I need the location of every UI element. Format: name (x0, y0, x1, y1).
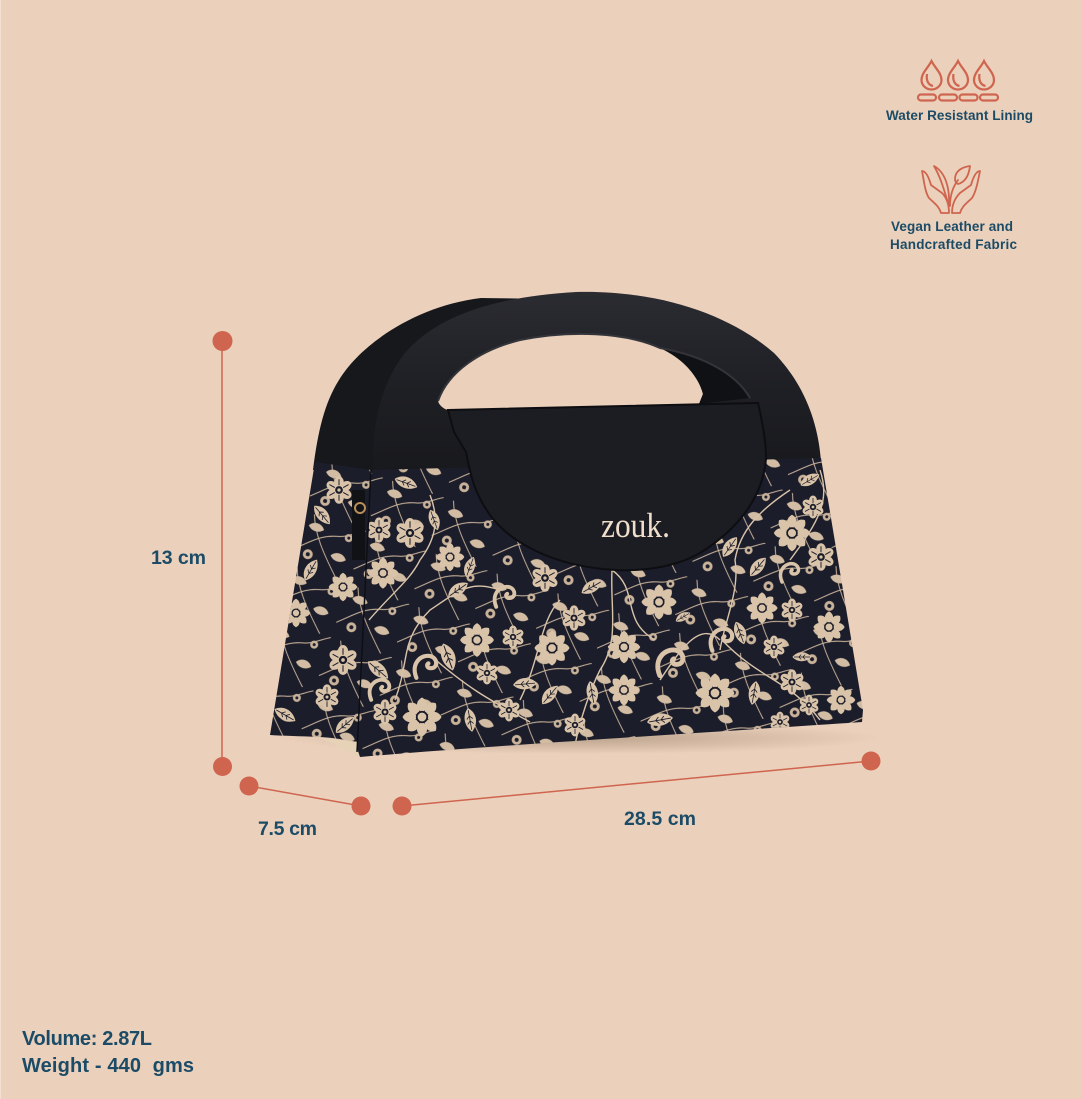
ground shadow (280, 722, 880, 754)
panel fold edge (357, 470, 371, 752)
volume and weight: Weight - 440 gms (22, 1055, 194, 1077)
label: water resistant lining: Water Resistant Lining (886, 108, 1033, 123)
label: vegan leather and handcrafted fabric (890, 219, 1017, 252)
dimension: height: 13 cm (151, 547, 206, 569)
strap loop (352, 490, 365, 560)
front handle (373, 292, 821, 472)
front fabric panel (355, 455, 870, 760)
dimension: height (151, 331, 232, 776)
handbag photo (260, 292, 880, 760)
dimension: width (392, 752, 880, 830)
handle rim stitching (438, 334, 750, 401)
volume and weight (22, 1028, 194, 1077)
handle opening (438, 334, 703, 411)
dimension: depth: 7.5 cm (258, 818, 317, 840)
logo: zouk. (601, 506, 670, 545)
dimension: depth (240, 776, 370, 840)
back handle seen through opening (660, 348, 750, 404)
back handle and bag interior (313, 298, 760, 470)
volume and weight: Volume: 2.87L (22, 1028, 152, 1050)
side fabric panel (270, 462, 370, 742)
dimension: width: 28.5 cm (624, 808, 696, 830)
icon: hands with leaf (922, 166, 980, 213)
label: vegan leather and handcrafted fabric: Handcrafted Fabric (890, 237, 1017, 252)
flap (448, 403, 766, 570)
gold ring (355, 503, 365, 513)
icon: water drops (918, 61, 998, 100)
cream lining wedge (317, 737, 360, 757)
label: vegan leather and handcrafted fabric: Vegan Leather and (891, 219, 1013, 234)
